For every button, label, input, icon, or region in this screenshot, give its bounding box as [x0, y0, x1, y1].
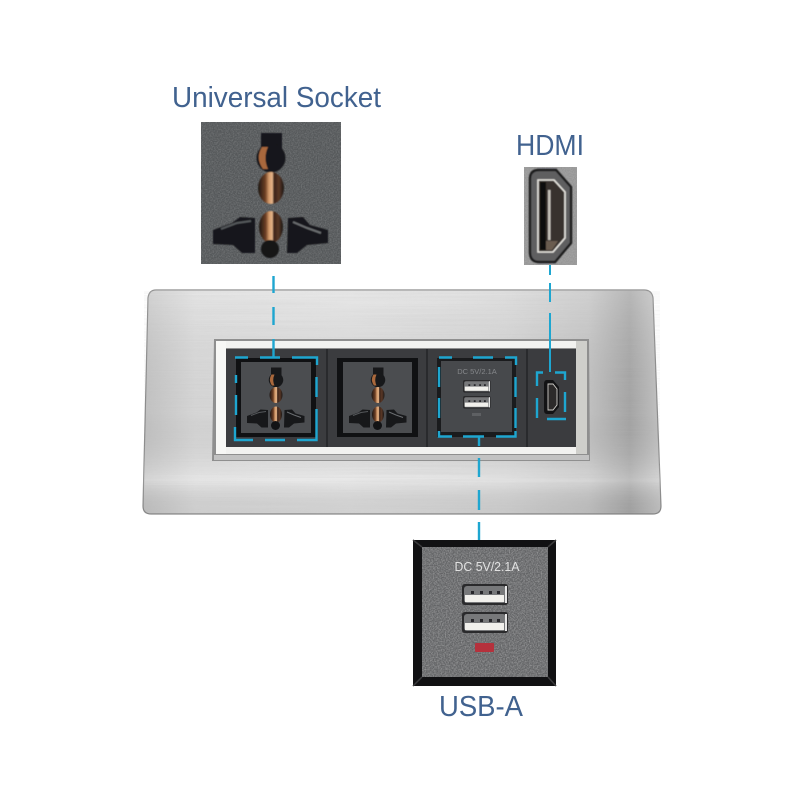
socket module 1	[236, 358, 316, 437]
callout: dashed highlight on socket	[235, 358, 317, 440]
dark module strip	[226, 349, 576, 447]
icon: USB-A module close-up	[413, 540, 556, 686]
arrow: leader line from socket close-up	[272, 276, 275, 357]
icon: universal socket close-up	[201, 122, 341, 264]
icon: USB-A module close-up: DC 5V/2.1A	[454, 560, 520, 574]
HDMI port on panel	[544, 380, 559, 414]
USB module	[437, 358, 516, 437]
callout: dashed highlight on USB	[439, 358, 516, 436]
panel: brushed metal faceplate	[143, 290, 661, 514]
window recess	[212, 339, 590, 461]
USB module: DC 5V/2.1A	[457, 367, 497, 376]
socket module 2	[337, 358, 418, 437]
arrow: leader line to USB close-up	[478, 437, 480, 540]
arrow: leader line from HDMI close-up	[549, 265, 551, 372]
title label: Universal Socket: Universal Socket	[172, 82, 381, 114]
title label: USB-A: USB-A	[439, 691, 523, 723]
callout: dashed highlight on HDMI	[537, 372, 566, 419]
icon: HDMI port close-up	[524, 167, 577, 265]
title label: HDMI: HDMI	[516, 130, 584, 162]
